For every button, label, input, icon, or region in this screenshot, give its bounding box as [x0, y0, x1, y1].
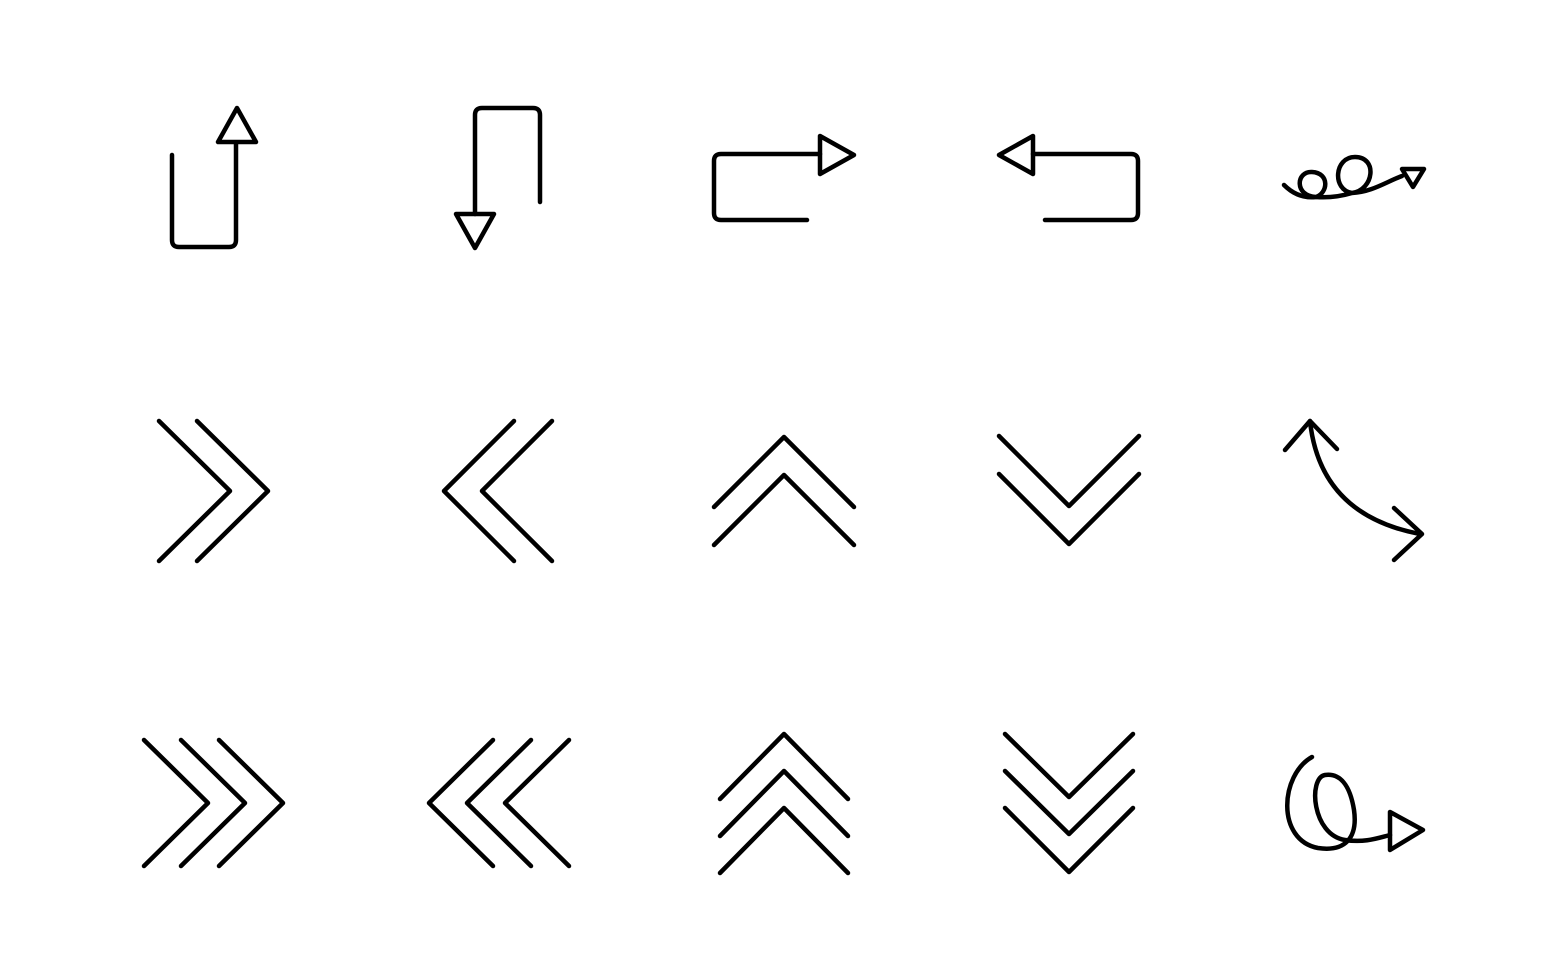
icon: double chevron down	[999, 436, 1139, 544]
icon: triple chevron left	[429, 740, 569, 866]
icon: triple chevron up	[720, 734, 848, 873]
icon: double chevron right	[159, 421, 268, 561]
icon: triple chevron right	[144, 740, 283, 866]
icon: loop arrow	[1287, 757, 1423, 850]
icon: double chevron left	[444, 421, 552, 561]
icon: u-turn down arrow	[456, 108, 540, 248]
icon: loop left arrow	[999, 136, 1138, 220]
icon: loop right arrow	[714, 136, 854, 220]
icon: u-turn up arrow	[172, 108, 256, 247]
icon: double chevron up	[714, 437, 854, 545]
icon: triple chevron down	[1005, 734, 1133, 872]
icon: curved arrow	[1285, 421, 1422, 560]
icon: squiggle arrow	[1284, 157, 1424, 197]
